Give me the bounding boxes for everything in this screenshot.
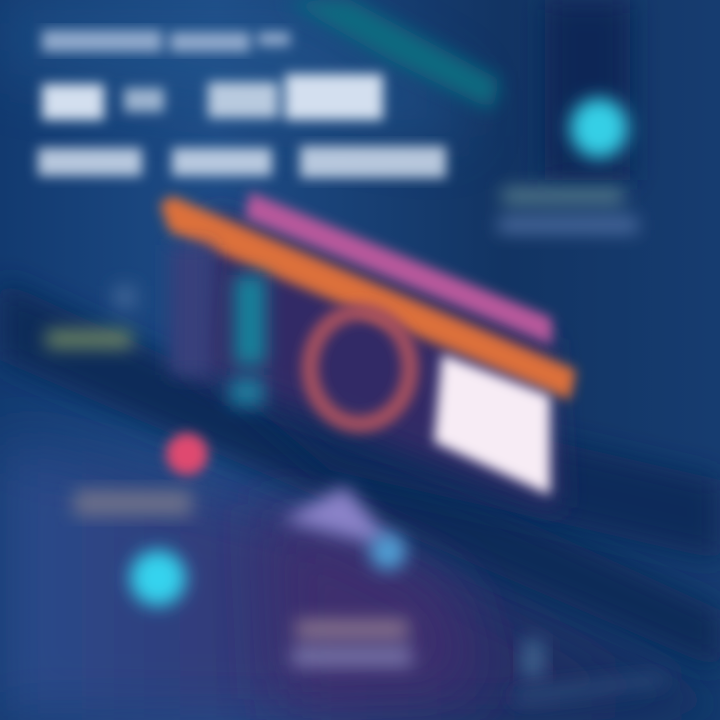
title line 2 [42, 74, 383, 120]
bar: teal [234, 275, 266, 365]
bar chart [170, 245, 266, 406]
label: bottom right [510, 674, 668, 704]
icon: light blue dot [370, 534, 406, 570]
label: lower centre [292, 620, 412, 666]
title line 3 [38, 146, 446, 178]
icon: purple triangle [282, 486, 398, 550]
title [38, 30, 446, 178]
icon: red dot [166, 433, 208, 475]
orange band [160, 196, 576, 400]
donut chart [310, 312, 410, 424]
icon: bottom right [522, 640, 544, 678]
bar: purple [170, 245, 212, 375]
left label [46, 286, 136, 348]
title line 1 [42, 30, 290, 52]
white card [434, 354, 550, 495]
bar: teal base [230, 378, 264, 406]
label: lower left [74, 490, 192, 516]
label: top right [498, 188, 638, 232]
icon: cyan circle top right [570, 98, 628, 158]
magenta band [245, 192, 552, 345]
teal accent stripe at top [285, 0, 500, 110]
icon: cyan circle lower left [130, 550, 186, 606]
